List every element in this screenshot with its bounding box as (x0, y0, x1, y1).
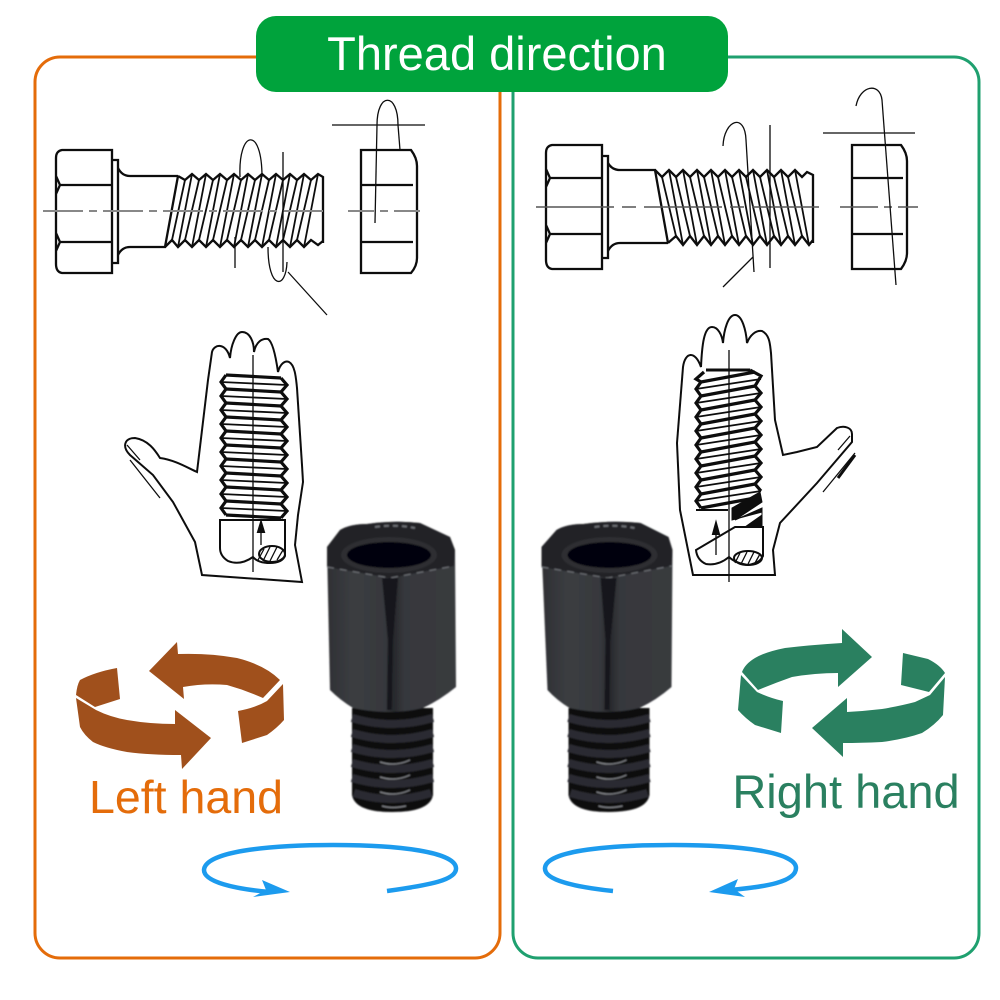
icon: right rotation arrows (738, 629, 945, 757)
panel: right hand (513, 57, 979, 958)
diagram: right-hand bolt (536, 88, 918, 287)
icon: right blue rotation arrow (545, 845, 796, 897)
black adapter bolt: left (327, 522, 456, 812)
black adapter bolt: right (542, 522, 672, 812)
title banner (256, 16, 728, 92)
diagram: right hand with thread (677, 315, 855, 582)
diagram: left hand with thread (125, 332, 303, 582)
diagram: left-hand bolt (43, 100, 426, 315)
label: right hand: Right hand (732, 765, 960, 818)
icon: left rotation arrows (76, 642, 284, 769)
title banner: Thread direction (327, 27, 667, 80)
icon: left blue rotation arrow (204, 845, 456, 897)
panel: left hand (35, 57, 500, 958)
label: left hand: Left hand (89, 771, 283, 823)
